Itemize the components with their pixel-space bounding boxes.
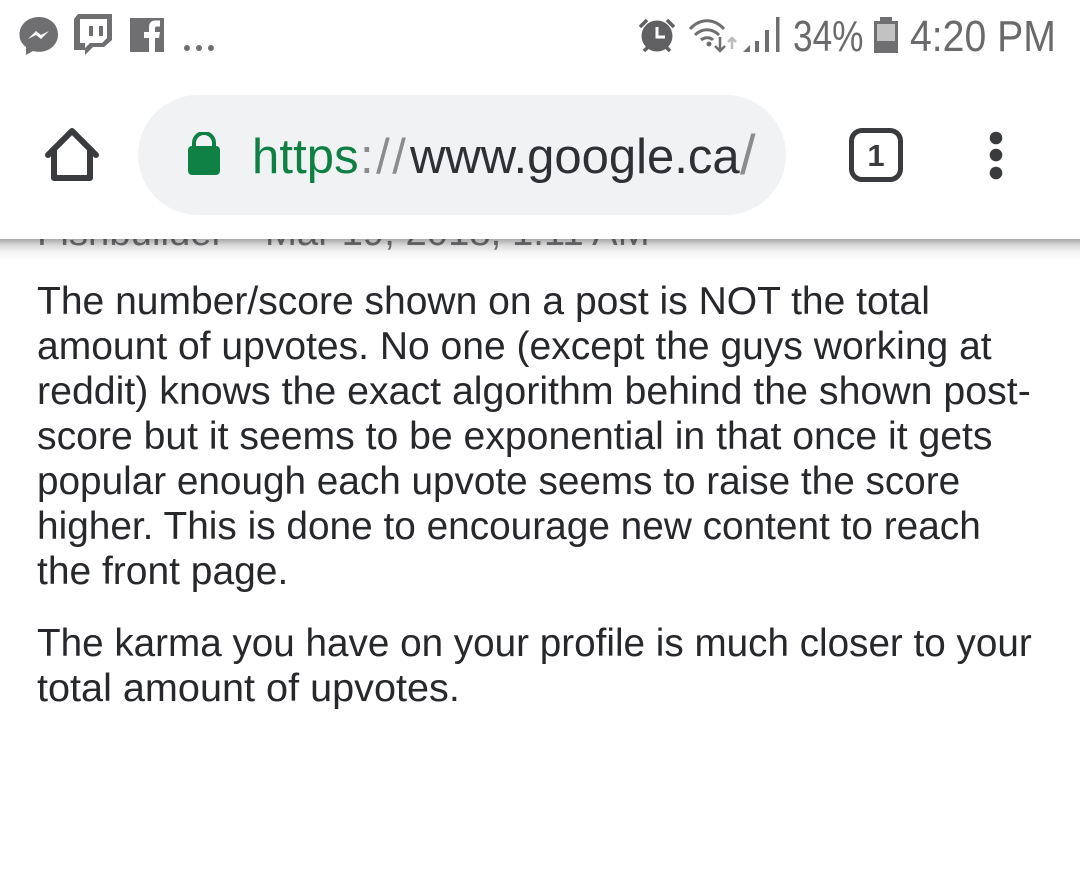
url: / xyxy=(740,123,756,186)
text block: second paragraph: total amount of upvotes. xyxy=(37,667,460,710)
icon: more notifications xyxy=(184,45,214,51)
text block: first paragraph: the front page. xyxy=(37,550,288,593)
text block: first paragraph: reddit) knows the exact algorithm behind the shown post- xyxy=(37,370,1031,413)
url: www.google.ca xyxy=(410,130,740,184)
text block: first paragraph: score but it seems to be exponential in that once it gets xyxy=(37,415,993,458)
icon: twitch xyxy=(74,14,112,55)
icon: tab counter xyxy=(849,128,903,182)
url xyxy=(252,123,756,186)
clipped author line behind toolbar: · xyxy=(242,211,255,254)
browser header xyxy=(0,0,1080,239)
icon: home xyxy=(45,128,99,181)
text block: first paragraph: The number/score shown on a post is NOT the total xyxy=(37,280,930,323)
icon: alarm clock xyxy=(640,20,674,52)
clipped author line behind toolbar xyxy=(37,211,650,254)
url: https xyxy=(252,130,359,184)
status bar system icons xyxy=(638,17,780,53)
text block: first paragraph: amount of upvotes. No one (except the guys working at xyxy=(37,325,992,368)
icon: tab counter: 1 xyxy=(867,138,885,173)
toolbar shadow xyxy=(0,239,1080,261)
text block: first paragraph: popular enough each upvote seems to raise the score xyxy=(37,460,960,503)
status bar notification icons xyxy=(20,14,214,55)
text block: second paragraph xyxy=(37,622,1032,710)
icon: facebook xyxy=(130,18,164,52)
battery percentage: 34% xyxy=(793,12,863,61)
clock: 4:20 PM xyxy=(910,12,1056,61)
text block: first paragraph xyxy=(37,280,1031,593)
icon: battery xyxy=(874,17,898,53)
text block: second paragraph: The karma you have on your profile is much closer to your xyxy=(37,622,1032,665)
icon: menu dots xyxy=(990,132,1002,180)
url: :// xyxy=(360,130,408,184)
text block: first paragraph: higher. This is done to encourage new content to reach xyxy=(37,505,981,548)
address bar xyxy=(138,95,786,215)
icon: lock xyxy=(188,132,220,175)
icon: cellular signal xyxy=(743,17,780,52)
clipped author line behind toolbar: Fishbuilder xyxy=(37,211,224,254)
icon: wifi xyxy=(690,21,736,51)
clipped author line behind toolbar: Mar 19, 2018, 1:11 AM xyxy=(265,211,650,254)
icon: messenger xyxy=(20,17,58,55)
